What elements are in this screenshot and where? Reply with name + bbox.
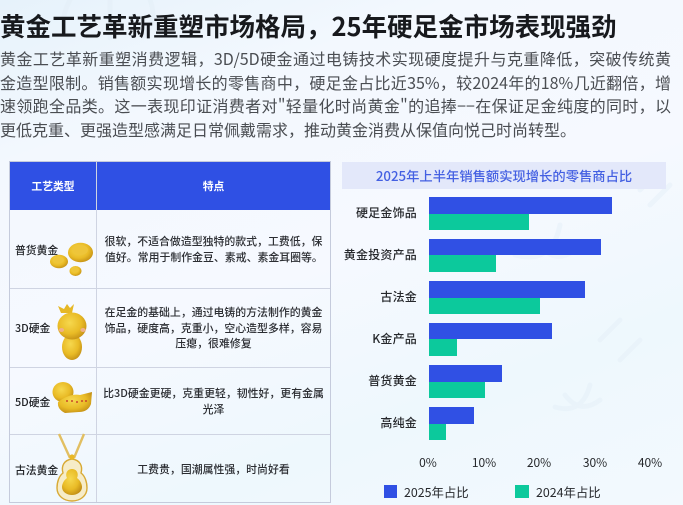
bar: ancient 2025 (429, 281, 585, 298)
intro paragraph: 更低克重、更强造型感满足日常佩戴需求，推动黄金消费从保值向悦己时尚转型。 (0, 117, 576, 141)
row label: ancient gold: 古法黄金 (15, 462, 58, 478)
panel: craft comparison table (9, 161, 331, 503)
axis label 10%: 10% (472, 454, 496, 471)
row text: ancient gold: 工费贵，国潮属性强，时尚好看 (137, 461, 290, 477)
row text: 3D hard gold: 饰品，硬度高，克重小，空心造型多样，容易 (105, 320, 322, 336)
bar: K gold 2025 (429, 323, 552, 339)
icon: gourd pendant (57, 434, 87, 501)
category: high purity gold: 高纯金 (380, 414, 417, 431)
chart title band (342, 162, 666, 189)
axis label 40%: 40% (638, 454, 662, 471)
axis label 0%: 0% (419, 454, 437, 471)
row text: regular gold: 值好。常用于制作金豆、素戒、素金耳圈等。 (105, 249, 323, 265)
category: ancient gold: 古法金 (380, 288, 417, 305)
row text: 5D hard gold: 比3D硬金更硬，克重更轻，韧性好，更有金属 (103, 385, 324, 401)
row text: regular gold (104, 233, 323, 265)
bar: ancient 2024 (429, 298, 540, 314)
axis label 30%: 30% (583, 454, 607, 471)
category: hard gold jewelry: 硬足金饰品 (356, 204, 417, 221)
bar: regular 2024 (429, 382, 485, 398)
icon: 5D gold figure (52, 382, 92, 413)
bar: K gold 2024 (429, 339, 457, 356)
row text: 3D hard gold: 压瘪，很难修复 (175, 335, 252, 351)
legend swatch 2024 (515, 485, 529, 498)
row label: 3D hard gold: 3D硬金 (15, 320, 50, 336)
bar: high purity 2024 (429, 424, 446, 440)
row text: 5D hard gold (103, 385, 324, 417)
row label: 5D hard gold: 5D硬金 (15, 394, 50, 410)
bar: investment 2024 (429, 255, 496, 272)
bar: hard gold 2024 (429, 214, 529, 230)
icon: 3D gold figure (58, 304, 86, 360)
category: regular gold: 普货黄金 (368, 372, 417, 389)
table header: features: 特点 (203, 178, 224, 194)
row text: 3D hard gold: 在足金的基础上，通过电铸的方法制作的黄金 (105, 304, 322, 320)
legend label 2024: 2024年占比 (536, 483, 601, 501)
category: investment gold: 黄金投资产品 (344, 246, 417, 263)
title: 黄金工艺革新重塑市场格局，25年硬足金市场表现强劲 (0, 7, 617, 44)
legend (384, 483, 601, 501)
row text: regular gold: 很软，不适合做造型独特的款式，工费低，保 (105, 233, 322, 249)
icon: gold beans (50, 243, 93, 276)
axis label 20%: 20% (527, 454, 551, 471)
legend swatch 2025 (384, 485, 397, 498)
legend label 2025: 2025年占比 (404, 483, 469, 501)
bar: regular 2025 (429, 365, 502, 382)
row text: 3D hard gold (104, 304, 322, 351)
bar: investment 2025 (429, 239, 601, 255)
table header: craft type: 工艺类型 (31, 178, 75, 194)
category: K gold: K金产品 (372, 330, 417, 347)
bar: high purity 2025 (429, 407, 474, 424)
intro paragraph (0, 47, 671, 141)
table header: craft type (10, 162, 96, 210)
row text: 5D hard gold: 光泽 (203, 401, 224, 417)
table header: features (97, 162, 330, 210)
bar: hard gold 2025 (429, 197, 612, 214)
row label: regular gold: 普货黄金 (15, 242, 58, 258)
chart title band: 2025年上半年销售额实现增长的零售商占比 (376, 166, 632, 185)
